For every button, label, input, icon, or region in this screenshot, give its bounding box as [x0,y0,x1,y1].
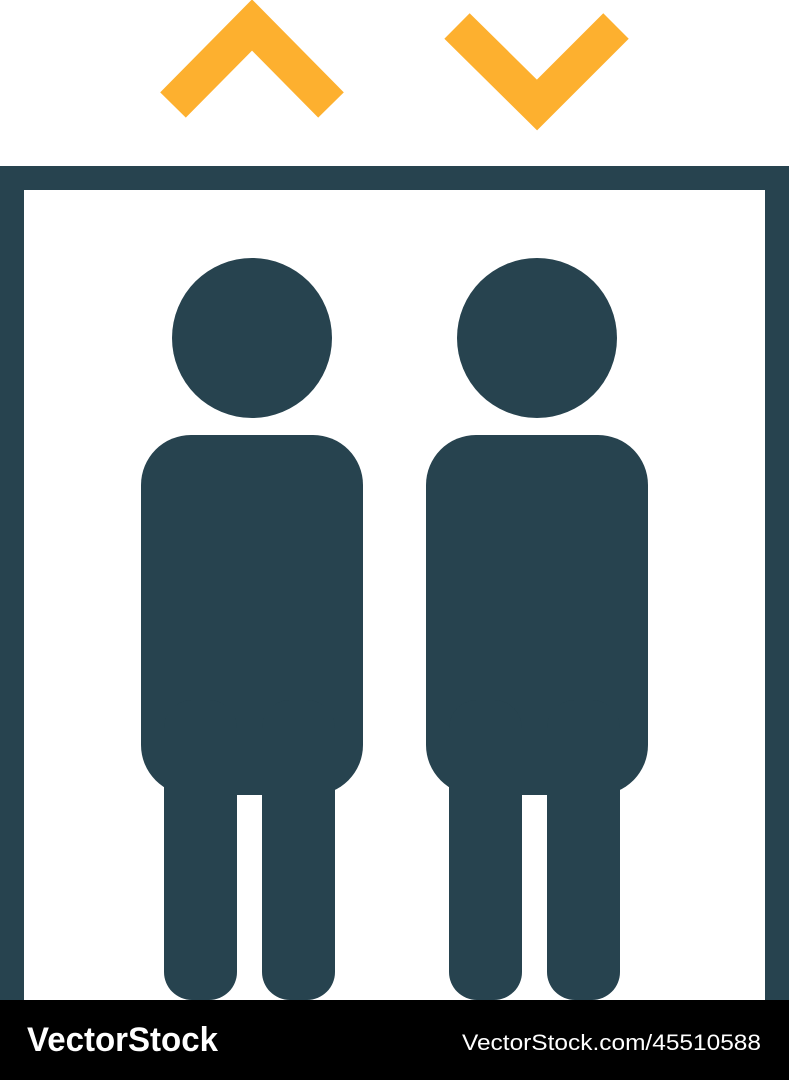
icon: up arrow [173,25,331,105]
person left [141,258,363,1000]
elevator frame [12,178,777,1018]
footer bar [0,1000,789,1080]
footer logo text: VectorStock [27,1021,218,1059]
icon: down arrow [457,26,616,105]
footer url text: VectorStock.com/45510588 [462,1030,761,1055]
person right [426,258,648,1000]
